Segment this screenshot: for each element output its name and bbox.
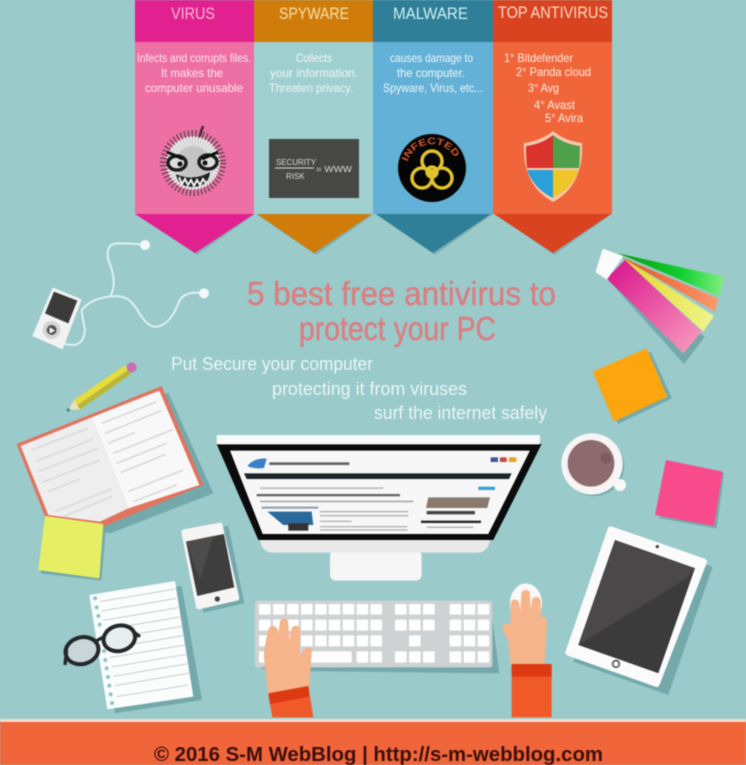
text: antivirus ranking — [504, 51, 591, 125]
icon: pink sticky note — [655, 460, 724, 529]
text: antivirus ranking: 4° Avast — [534, 98, 576, 112]
text: malware description: Spyware, Virus, etc... — [383, 81, 483, 95]
subtitle text: Put Secure your computer — [171, 354, 373, 374]
icon: music player with earphones — [32, 240, 209, 349]
icon: tablet — [568, 529, 713, 695]
text: spyware description: your information. — [270, 66, 358, 80]
heading: spyware: SPYWARE — [279, 4, 349, 23]
text: spyware description: Threaten privacy. — [269, 81, 353, 95]
panel: virus column — [135, 0, 255, 255]
subtitle text — [171, 354, 547, 423]
text: malware description — [383, 51, 483, 95]
text: virus description: It makes the — [161, 66, 223, 80]
icon: chalkboard security risk — [269, 139, 359, 198]
text: virus description: Infects and corrupts files. — [137, 51, 251, 65]
heading: top antivirus: TOP ANTIVIRUS — [498, 3, 608, 22]
icon: infected biohazard — [397, 133, 467, 203]
heading: virus: VIRUS — [171, 4, 215, 23]
icon: chalkboard security risk: SECURITY — [276, 157, 316, 167]
icon: computer monitor — [217, 435, 542, 581]
icon: virus monster — [166, 126, 220, 190]
footer bar — [0, 719, 746, 765]
text: virus description: computer unusable — [145, 81, 243, 95]
text: antivirus ranking: 5° Avira — [545, 111, 583, 125]
icon: pencil — [67, 362, 137, 412]
text: malware description: the computer. — [397, 66, 465, 80]
text: antivirus ranking: 2° Panda cloud — [516, 65, 591, 79]
icon: coffee cup — [561, 433, 626, 496]
icon: shield — [524, 131, 582, 202]
icon: notepaper — [89, 581, 202, 713]
title: 5 best free antivirus to — [247, 275, 556, 312]
panel: spyware column — [254, 0, 374, 255]
icon: infected biohazard: INFECTED — [401, 136, 460, 162]
icon: colour swatch fan — [597, 250, 723, 364]
text: virus description — [137, 51, 251, 95]
panel: top antivirus column — [493, 0, 612, 255]
title: protect your PC — [299, 310, 496, 347]
title — [247, 275, 556, 347]
icon: chalkboard security risk: = WWW — [316, 164, 352, 174]
icon: open book — [17, 386, 213, 533]
text: spyware description — [269, 51, 358, 95]
subtitle text: surf the internet safely — [374, 403, 547, 423]
screen content: website — [244, 457, 516, 531]
icon: chalkboard security risk: RISK — [286, 172, 305, 181]
icon: orange sticky note — [593, 348, 672, 424]
icon: glasses — [62, 622, 140, 668]
subtitle text: protecting it from viruses — [272, 379, 467, 399]
icon: keyboard — [255, 600, 499, 673]
text: malware description: causes damage to — [390, 51, 473, 65]
icon: yellow sticky note — [38, 516, 106, 581]
text: antivirus ranking: 1° Bitdefender — [504, 51, 573, 65]
icon: smartphone — [184, 525, 244, 613]
icon: mouse and right hand — [503, 583, 552, 717]
icon: left hand typing — [265, 620, 313, 717]
heading: malware: MALWARE — [393, 4, 468, 23]
panel: malware column — [372, 0, 494, 255]
text: antivirus ranking: 3° Avg — [528, 81, 559, 95]
text: spyware description: Collects — [296, 51, 332, 65]
